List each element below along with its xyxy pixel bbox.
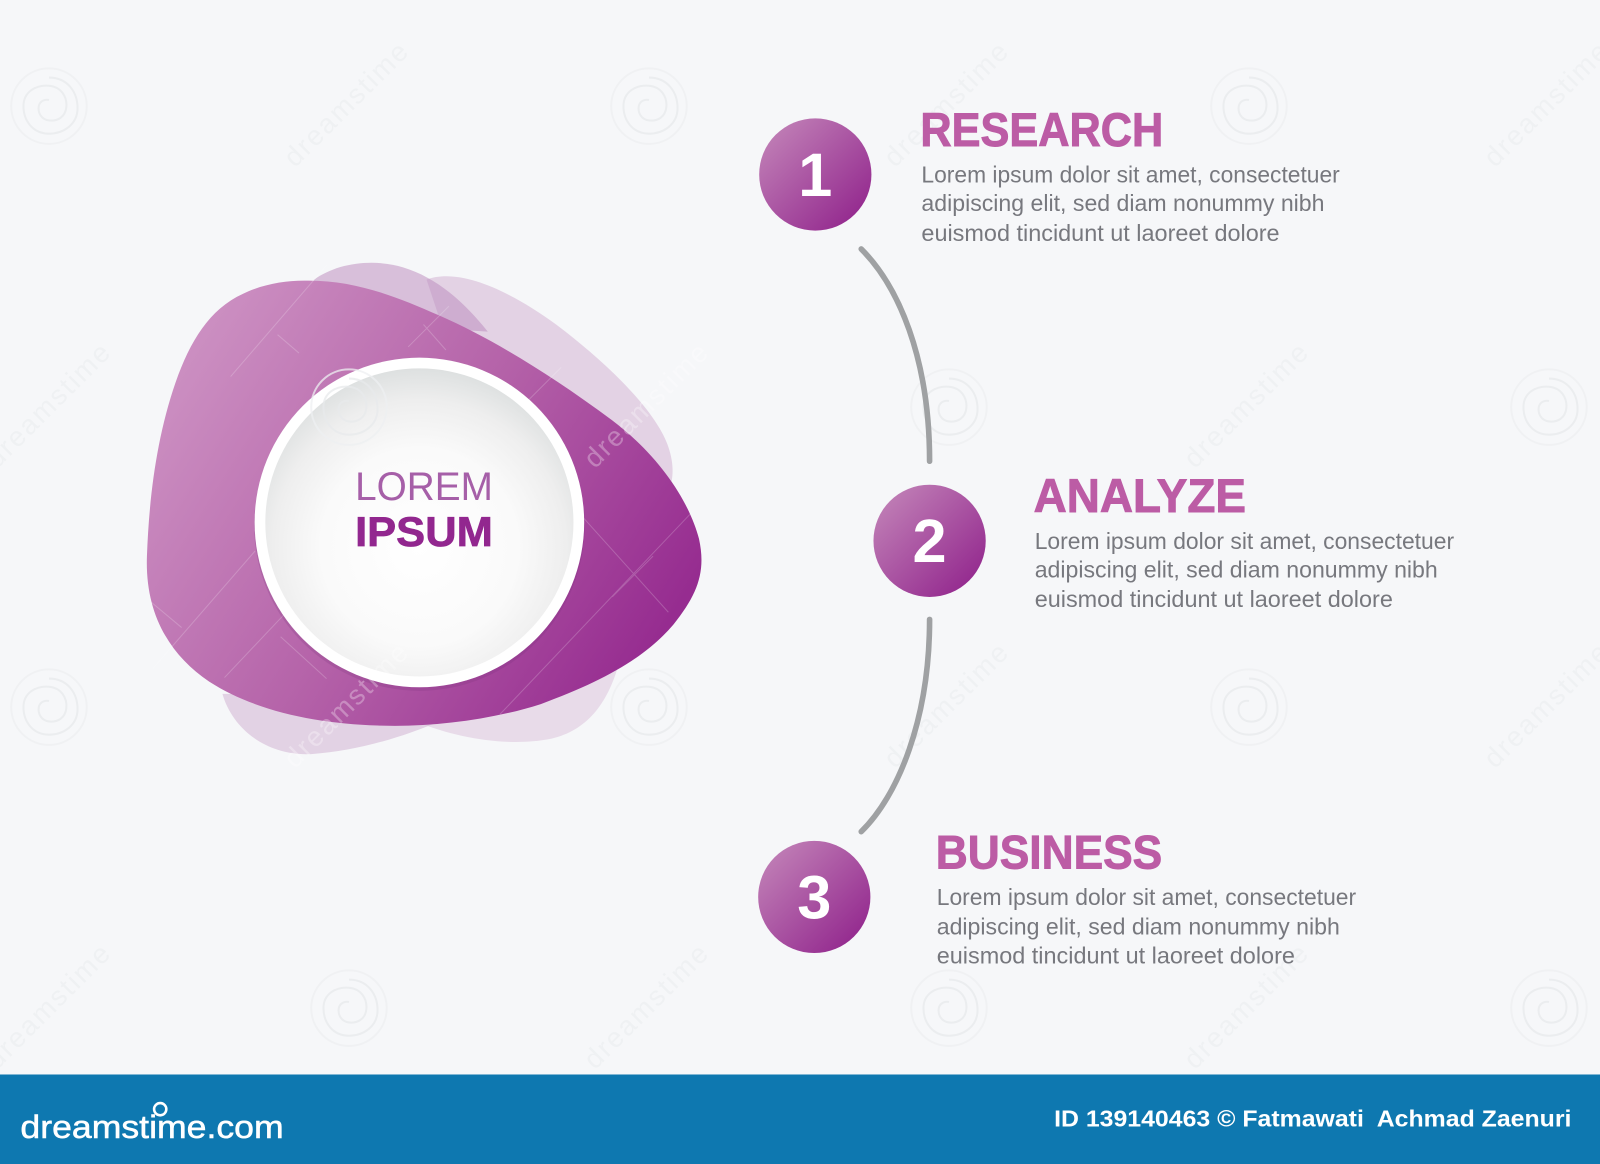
watermark pattern: dreamstime [877,635,1015,774]
translucent back blob: top right [427,276,673,492]
body text 1 [921,162,1340,246]
watermark lines on blob [151,265,694,714]
translucent back blob: top left [306,263,488,332]
body text 1: Lorem ipsum dolor sit amet, consectetuer [921,162,1340,188]
watermark pattern: dreamstime [577,936,715,1075]
translucent back blob: bottom right [418,665,618,742]
step 3 [758,826,1356,968]
watermark pattern: dreamstime [877,34,1015,173]
number badge 2: 2 [913,507,947,575]
heading: BUSINESS: BUSINESS [936,826,1162,878]
footer logo text: dreamstime.com [20,1108,284,1145]
step 2 [873,470,1454,612]
watermark over blob: dreamstime [577,335,715,474]
watermark pattern: dreamstime [277,34,415,173]
watermark pattern: dreamstime [1177,335,1315,474]
number badge 2 [873,485,986,597]
body text 3: Lorem ipsum dolor sit amet, consectetuer [937,884,1356,910]
watermark over blob: dreamstime [277,635,415,774]
body text 2 [1035,528,1454,612]
number badge 3: 3 [797,863,831,931]
footer bar [0,1074,1600,1164]
main gradient blob [147,281,701,726]
body text 3: adipiscing elit, sed diam nonummy nibh [937,914,1340,940]
translucent back blob: bottom left [222,694,437,754]
body text 2: Lorem ipsum dolor sit amet, consectetuer [1035,528,1454,554]
body text 1: euismod tincidunt ut laoreet dolore [921,220,1280,246]
body text 2: euismod tincidunt ut laoreet dolore [1035,586,1393,612]
step 1 [759,104,1340,246]
body text 3: euismod tincidunt ut laoreet dolore [937,942,1295,968]
center label: LOREM: LOREM [355,465,493,509]
body text 1: adipiscing elit, sed diam nonummy nibh [921,190,1324,216]
body text 2: adipiscing elit, sed diam nonummy nibh [1035,557,1438,583]
central blob graphic [147,263,715,774]
number badge 1 [759,118,871,231]
watermark pattern: dreamstime [1177,936,1315,1075]
number badge 1: 1 [798,141,832,209]
watermark over blob [277,335,715,774]
center label: IPSUM: IPSUM [355,508,493,555]
body text 3 [937,884,1356,968]
footer credit: ID 139140463 © Fatmawati Achmad Zaenuri [1054,1106,1571,1132]
connector arc: step 1 to 2 [861,249,930,461]
heading: RESEARCH: RESEARCH [920,104,1163,156]
connector arc: step 2 to 3 [861,619,930,832]
heading: ANALYZE: ANALYZE [1034,470,1246,522]
white circle with shadow [254,358,585,691]
number badge 3 [758,841,870,953]
